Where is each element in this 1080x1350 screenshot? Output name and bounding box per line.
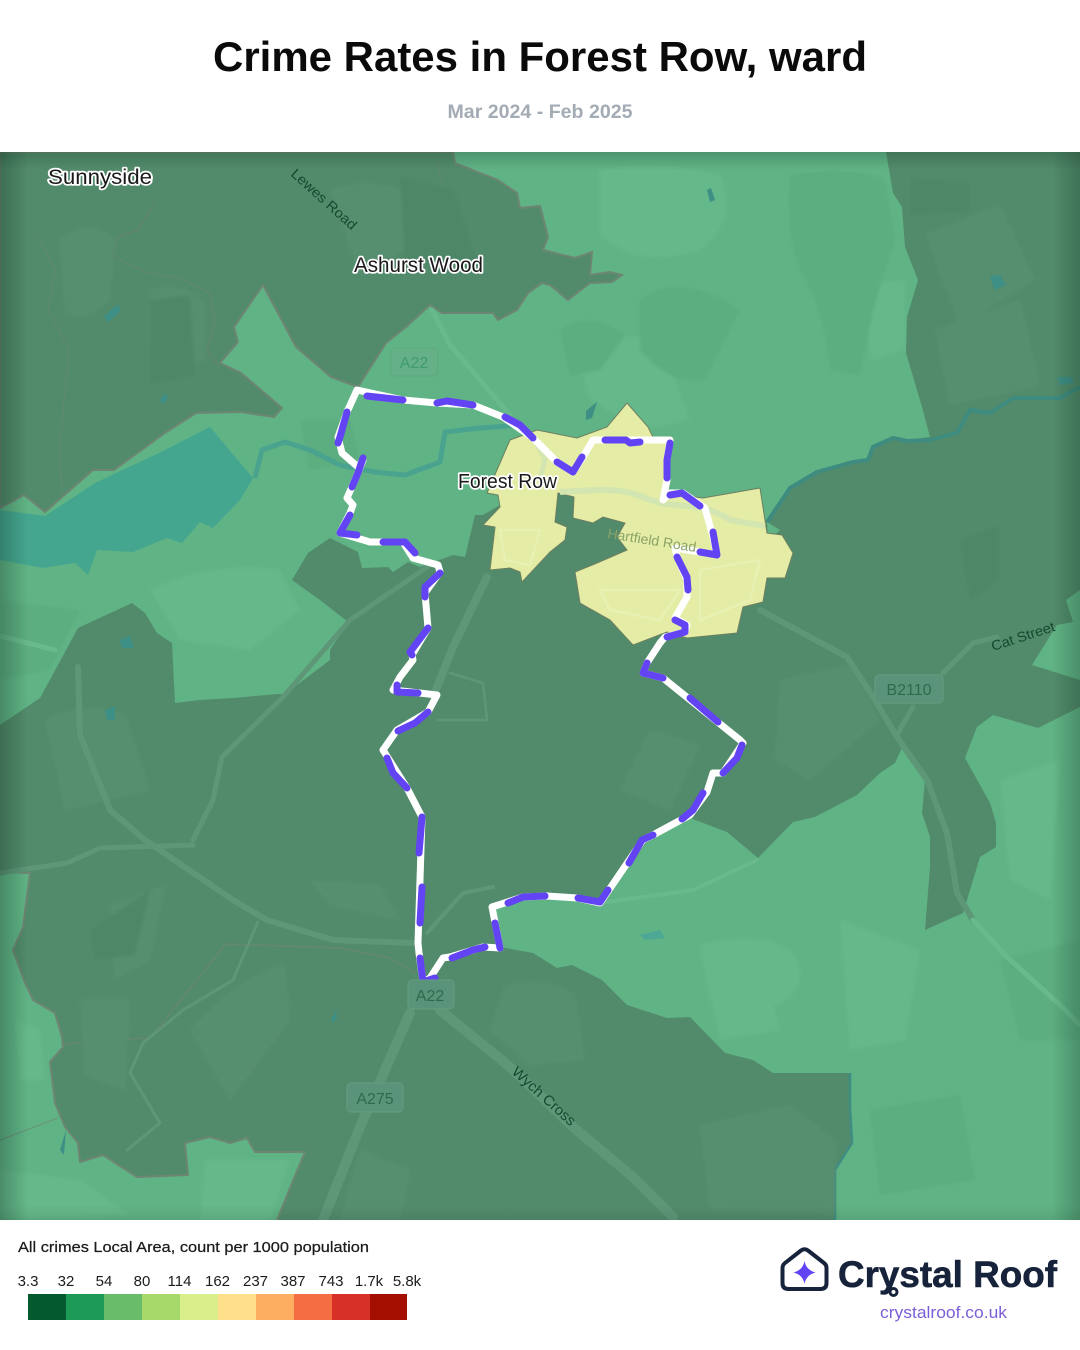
place label: Sunnyside: Sunnyside xyxy=(48,166,152,189)
dark green region: north west xyxy=(0,152,622,512)
high-crime yellow-green area: Forest Row xyxy=(483,403,793,645)
ward boundary: white outline xyxy=(338,390,743,982)
logo: Crystal Roof xyxy=(782,1249,1058,1322)
place label: Ashurst Wood: Ashurst Wood xyxy=(354,254,483,277)
roads xyxy=(0,565,997,1220)
road shield: B2110 xyxy=(875,675,943,703)
title: Crime Rates in Forest Row, ward xyxy=(213,33,867,80)
place label: Forest Row: Forest Row xyxy=(458,471,558,493)
road shield: A22 south: A22 xyxy=(416,988,444,1005)
legend scale values: 743 xyxy=(318,1273,344,1290)
road label: Wych Cross: Wych Cross xyxy=(508,1064,578,1130)
road label: Lewes Road: Lewes Road xyxy=(288,165,360,233)
wordmark: Crystal Roof xyxy=(838,1254,1058,1295)
small ponds xyxy=(60,188,1074,1155)
dark green region: central, south and east xyxy=(0,152,1080,1220)
ward boundary: purple dashes xyxy=(338,396,742,982)
patches in dark region xyxy=(83,1038,836,1214)
light green base area xyxy=(0,152,1080,1220)
subtle light area patches xyxy=(0,166,1060,1220)
road shield: A275: A275 xyxy=(356,1091,394,1108)
wordmark key detail xyxy=(890,1288,897,1296)
small light triangle beside yellow area xyxy=(767,522,780,534)
lake xyxy=(0,427,253,575)
legend scale values: 80 xyxy=(134,1273,150,1290)
icon: house with star xyxy=(782,1249,826,1289)
legend colour bar xyxy=(28,1294,407,1320)
legend scale values: 3.3 xyxy=(18,1273,38,1290)
road shield: B2110: B2110 xyxy=(886,682,932,699)
legend xyxy=(18,1239,422,1320)
legend scale values xyxy=(18,1273,422,1290)
website link: crystalroof.co.uk xyxy=(880,1304,1008,1322)
map panel xyxy=(0,152,1080,1220)
legend scale values: 1.7k xyxy=(355,1273,384,1290)
legend title: All crimes Local Area, count per 1000 population xyxy=(18,1239,369,1256)
legend scale values: 237 xyxy=(243,1273,268,1290)
road label: Hartfield Road: Hartfield Road xyxy=(607,525,697,555)
road shield: A22 north xyxy=(391,348,438,376)
legend scale values: 387 xyxy=(280,1273,306,1290)
legend scale values: 162 xyxy=(205,1273,230,1290)
map edge vignette xyxy=(0,152,1080,1220)
legend scale values: 32 xyxy=(58,1273,74,1290)
road label: Cat Street: Cat Street xyxy=(989,618,1057,654)
legend scale values: 54 xyxy=(96,1273,112,1290)
legend scale values: 114 xyxy=(168,1273,191,1290)
river east xyxy=(767,387,1080,522)
boundary edges xyxy=(0,160,852,1220)
road shield: A22 south xyxy=(408,980,454,1009)
legend scale values: 5.8k xyxy=(393,1273,422,1290)
subtitle: Mar 2024 - Feb 2025 xyxy=(448,102,633,123)
river west xyxy=(255,425,520,478)
road shield: A22 north: A22 xyxy=(400,355,428,372)
road shield: A275 xyxy=(347,1083,403,1112)
